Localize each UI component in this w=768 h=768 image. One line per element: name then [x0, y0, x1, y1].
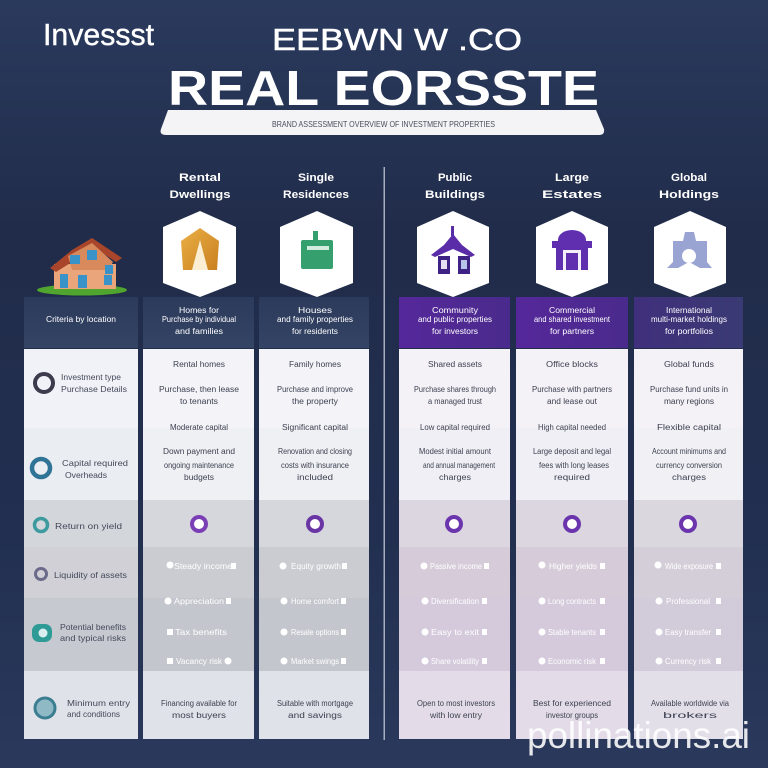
brand label: Invessst: [43, 17, 154, 52]
column 2 header: [259, 297, 369, 348]
column 1 bullets: Vacancy risk: [176, 657, 223, 666]
column 4 bullets: [538, 562, 605, 666]
rating icon: [447, 517, 461, 531]
column 1 details: Moderate capital: [170, 423, 228, 432]
column 5 details: Flexible capital: [657, 423, 721, 432]
row labels header: [24, 297, 138, 348]
column 5 details: many regions: [664, 397, 714, 406]
title: REAL EORSSTE: [168, 62, 599, 116]
column 3 details: and annual management: [423, 461, 496, 470]
row label 3: [34, 518, 122, 532]
column 3 details: Purchase shares through: [414, 385, 496, 394]
row label 6: Minimum entry: [67, 698, 131, 708]
row label 6: [35, 698, 131, 719]
row label 4: Liquidity of assets: [54, 570, 127, 580]
column 4 details: and lease out: [547, 397, 598, 406]
column 4 details: [532, 360, 612, 482]
column 4 heading: [542, 172, 602, 201]
column 1 details: to tenants: [180, 397, 218, 406]
column 5 header: International: [666, 306, 712, 315]
column 5 details: Global funds: [664, 360, 714, 369]
column 3 bullets: Diversification: [431, 597, 479, 606]
column 4 header: for partners: [550, 327, 594, 336]
column 2 details: the property: [292, 397, 338, 406]
column 5 details: Purchase fund units in: [650, 385, 728, 394]
column 5 details: [650, 360, 728, 482]
column 1 note: most buyers: [172, 711, 226, 720]
column 4 details: Office blocks: [546, 360, 598, 369]
column 3 heading: Public: [438, 172, 472, 184]
panel: column 1: [143, 172, 254, 739]
column 4 details: fees with long leases: [539, 461, 609, 470]
column 3 note: [417, 699, 495, 720]
icon: purple temple hexagon: [417, 211, 489, 297]
column 5 bullets: Professional: [666, 597, 710, 606]
row label 5: and typical risks: [60, 633, 126, 643]
column 1 bullets: Tax benefits: [175, 628, 227, 637]
column 4 bullets: Stable tenants: [548, 628, 596, 637]
website heading: EEBWN W .CO: [272, 22, 522, 57]
column 2 header: for residents: [292, 327, 338, 336]
icon: green building hexagon: [280, 211, 353, 297]
column 5 bullets: Easy transfer: [665, 628, 711, 637]
column 3 header: for investors: [432, 327, 478, 336]
center divider: [384, 167, 385, 740]
column 4 heading: Large: [555, 172, 589, 184]
column 2 bullets: [280, 562, 347, 666]
row label 5: [32, 622, 126, 643]
column 4 bullets: Long contracts: [548, 597, 596, 606]
column 2 details: Family homes: [289, 360, 341, 369]
panel: column 2: [259, 172, 369, 739]
column 2 bullets: Resale options: [291, 628, 339, 637]
column 3 heading: [425, 172, 485, 201]
column 2 details: included: [297, 473, 333, 482]
column 3 header: [399, 297, 510, 348]
column 3 note: with low entry: [429, 711, 482, 720]
column 3 heading: Buildings: [425, 189, 485, 201]
column 1 header: [143, 297, 254, 348]
column 1 details: Down payment and: [163, 447, 235, 456]
column 2 header: and family properties: [277, 315, 353, 324]
column 2 heading: Single: [298, 172, 334, 184]
subtitle ribbon: [161, 110, 604, 135]
column 3 note: Open to most investors: [417, 699, 495, 708]
rating icon: [308, 517, 322, 531]
column 1 heading: [170, 172, 230, 201]
rating icon: [192, 517, 206, 531]
icon: purple hall hexagon: [536, 211, 608, 297]
column 4 bullets: Higher yields: [549, 562, 597, 571]
column 5 heading: Holdings: [659, 189, 719, 201]
column 1 bullets: [164, 562, 236, 666]
column 3 bullets: [420, 562, 489, 666]
panel: column 5: [634, 172, 743, 739]
column 1 bullets: Steady income: [174, 562, 233, 571]
panel: column 3: [399, 172, 510, 739]
column 3 header: Community: [432, 306, 478, 315]
icon: house: [37, 238, 127, 296]
row label 1: Purchase Details: [61, 384, 127, 394]
column 4 details: Large deposit and legal: [533, 447, 611, 456]
column 5 note: [651, 699, 730, 720]
rating icon: [681, 517, 695, 531]
column 1 heading: Dwellings: [170, 189, 230, 201]
column 1 header: Purchase by individual: [162, 315, 236, 324]
column 5 heading: [659, 172, 719, 201]
column 5 bullets: Wide exposure: [665, 562, 713, 571]
column 2 details: Renovation and closing: [278, 447, 352, 456]
column 2 details: costs with insurance: [281, 461, 350, 470]
column 5 details: charges: [672, 473, 706, 482]
column 1 note: [161, 699, 237, 720]
column 5 details: Account minimums and: [652, 447, 726, 456]
column 1 details: ongoing maintenance: [164, 461, 234, 470]
column 1 details: [159, 360, 240, 482]
column 4 note: investor groups: [546, 711, 598, 720]
column 1 details: Purchase, then lease: [159, 385, 240, 394]
column 1 bullets: Appreciation: [174, 597, 224, 606]
column 3 details: [414, 360, 496, 482]
column 4 heading: Estates: [542, 189, 602, 201]
column 4 note: [533, 699, 611, 720]
column 3 details: a managed trust: [428, 397, 483, 406]
column 4 bullets: Economic risk: [548, 657, 597, 666]
column 4 details: required: [554, 473, 590, 482]
column 1 note: Financing available for: [161, 699, 237, 708]
column 1 details: Rental homes: [173, 360, 225, 369]
column 5 header: for portfolios: [665, 327, 713, 336]
column 2 bullets: Equity growth: [291, 562, 341, 571]
column 5 heading: Global: [671, 172, 707, 184]
column 4 header: [516, 297, 628, 348]
column 1 details: budgets: [184, 473, 214, 482]
column 2 details: Purchase and improve: [277, 385, 354, 394]
icon: orange house hexagon: [163, 211, 236, 297]
column 2 details: Significant capital: [282, 423, 348, 432]
row label 5: Potential benefits: [60, 622, 126, 632]
subtitle ribbon: BRAND ASSESSMENT OVERVIEW OF INVESTMENT PROPERTIES: [272, 119, 495, 129]
column 2 heading: [283, 172, 349, 201]
column 3 header: and public properties: [418, 315, 492, 324]
column 5 details: currency conversion: [656, 461, 722, 470]
row label 1: Investment type: [61, 372, 121, 382]
icon: lavender emblem hexagon: [654, 211, 726, 297]
column 2 header: Houses: [298, 306, 332, 315]
row labels header: Criteria by location: [46, 315, 116, 324]
column 4 header: and shared investment: [534, 315, 611, 324]
row label 2: Capital required: [62, 458, 128, 468]
column 5 note: Available worldwide via: [651, 699, 730, 708]
column 5 header: [634, 297, 743, 348]
row label 1: [35, 372, 127, 394]
column 2 bullets: Market swings: [291, 657, 339, 666]
column 3 details: Low capital required: [420, 423, 490, 432]
watermark: pollinations.ai: [527, 715, 750, 756]
row label 6: and conditions: [67, 709, 120, 719]
panel: column 4: [516, 172, 628, 739]
column 3 details: charges: [439, 473, 471, 482]
column 4 note: Best for experienced: [533, 699, 611, 708]
column 3 bullets: Share volatility: [431, 657, 479, 666]
column 4 header: Commercial: [549, 306, 595, 315]
column 5 note: brokers: [663, 711, 717, 720]
column 2 heading: Residences: [283, 189, 349, 201]
column 4 details: High capital needed: [538, 423, 606, 432]
column 3 bullets: Passive income: [430, 562, 483, 571]
column 3 bullets: Easy to exit: [431, 628, 480, 637]
column 1 header: and families: [175, 327, 223, 336]
column 1 heading: Rental: [179, 172, 221, 184]
column 5 bullets: [654, 562, 721, 666]
row label 2: [32, 458, 128, 480]
column 3 details: Modest initial amount: [419, 447, 492, 456]
panel: row labels column: [24, 297, 138, 739]
row label 3: Return on yield: [55, 521, 122, 531]
row label 4: [36, 568, 127, 580]
column 4 details: Purchase with partners: [532, 385, 612, 394]
row label 2: Overheads: [65, 470, 107, 480]
column 5 header: multi-market holdings: [651, 315, 727, 324]
column 2 note: and savings: [288, 711, 342, 720]
column 5 bullets: Currency risk: [665, 657, 712, 666]
column 2 note: Suitable with mortgage: [277, 699, 354, 708]
column 2 details: [277, 360, 354, 482]
column 3 details: Shared assets: [428, 360, 482, 369]
rating icon: [565, 517, 579, 531]
column 2 bullets: Home comfort: [291, 597, 340, 606]
column 1 header: Homes for: [179, 306, 219, 315]
column 2 note: [277, 699, 354, 720]
